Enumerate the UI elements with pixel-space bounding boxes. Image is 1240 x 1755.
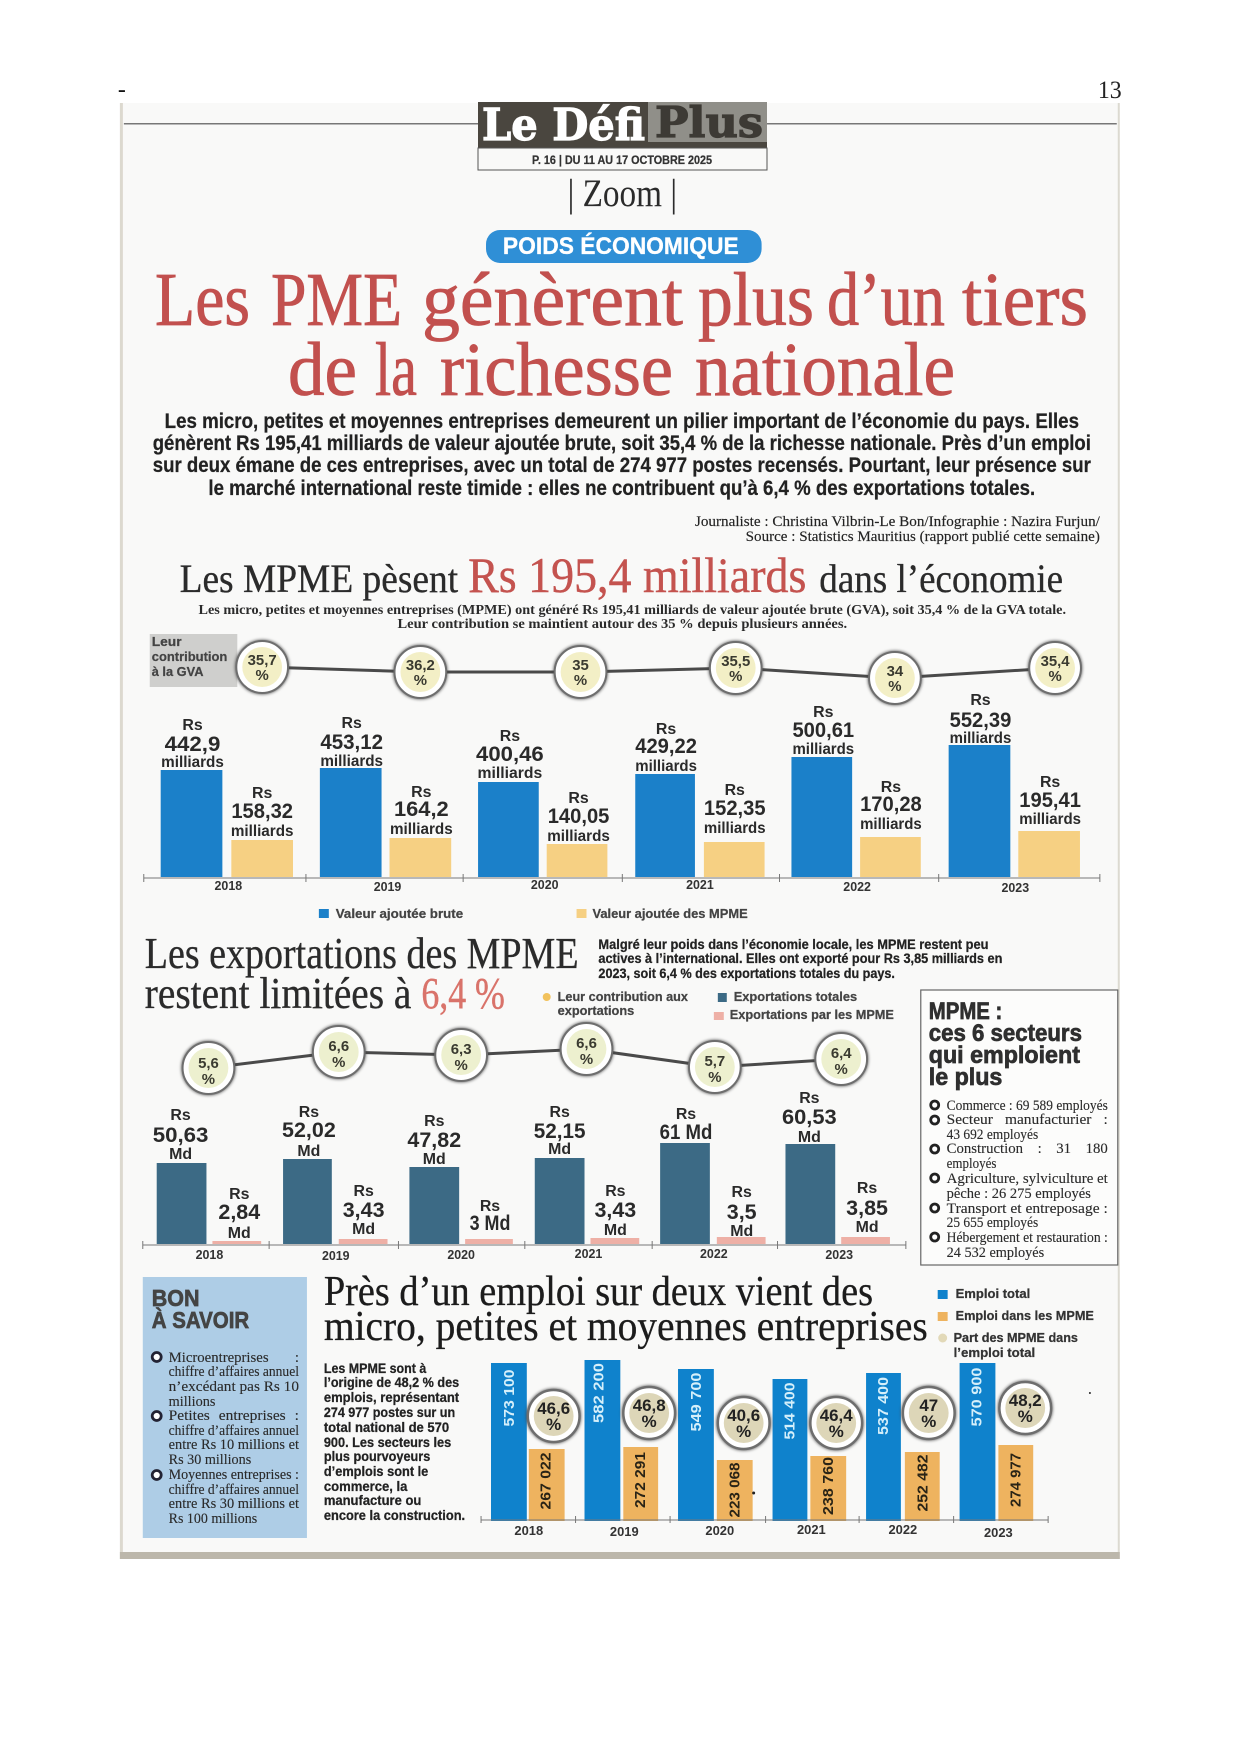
line chart: contribution GVA: % [888, 678, 902, 695]
main title: génèrent [422, 258, 683, 342]
jobs text block: 274 977 postes sur un [324, 1405, 455, 1420]
jobs text block: manufacture ou [324, 1493, 421, 1508]
bar chart: exportations: Rs [353, 1183, 374, 1200]
bar chart: emploi: 238 760 [820, 1457, 837, 1515]
bar chart: valeur ajoutée: Rs [813, 704, 834, 721]
bar chart: exportations: Md [730, 1223, 753, 1240]
definitions list: entre Rs 30 millions et [169, 1496, 300, 1512]
bar chart: valeur ajoutée: Rs [182, 717, 203, 734]
heading: jobs section: Près d’un emploi sur deux vient des [324, 1269, 873, 1315]
main title: tiers [962, 258, 1088, 342]
bar chart: valeur ajoutée: Rs [656, 721, 676, 738]
intro paragraph [153, 410, 1091, 500]
line chart: contribution GVA: % [256, 667, 269, 684]
label: contribution à la GVA: contribution [152, 649, 227, 664]
heading: GVA section: Rs 195,4 milliards [468, 548, 806, 603]
bar chart: exportations: Rs [170, 1107, 191, 1124]
panel heading [152, 1285, 250, 1333]
bar chart: emploi: 2021 [797, 1522, 826, 1537]
exports intro text: actives à l’international. Elles ont exporté pour Rs 3,85 milliards en [598, 951, 1002, 966]
sector list: Transport et entreposage : [947, 1201, 1108, 1217]
bar chart: valeur ajoutée: 2018 [215, 879, 242, 893]
heading: jobs section [324, 1269, 928, 1350]
sector list: 25 655 employés [947, 1215, 1038, 1231]
bar chart: emploi: % [736, 1422, 751, 1441]
definitions list: millions [169, 1394, 216, 1410]
line chart: contribution GVA: 35 [572, 657, 589, 674]
definitions list [152, 1350, 300, 1527]
bar chart: emploi: 2018 [514, 1523, 543, 1538]
bar chart: emploi: 537 400 [875, 1377, 892, 1435]
bar chart: valeur ajoutée: milliards [478, 765, 542, 782]
bar chart: exportations: 61 Md [660, 1121, 712, 1144]
legend: exports: Exportations par les MPME [730, 1007, 894, 1022]
line chart: contribution GVA: 35,5 [721, 653, 750, 670]
bar chart: emploi: 272 291 [632, 1452, 649, 1508]
jobs text block: Les MPME sont à [324, 1361, 427, 1376]
intro paragraph: sur deux émane de ces entreprises, avec un total de 274 977 postes recensés. Pourtant, leur présence sur [153, 454, 1091, 477]
bar chart: valeur ajoutée: Rs [881, 779, 901, 796]
masthead logo: P. 16 | DU 11 AU 17 OCTOBRE 2025 [532, 153, 712, 167]
bar chart: valeur ajoutée: 552,39 [950, 709, 1011, 732]
heading: GVA section: dans l’économie [819, 556, 1063, 601]
bar chart: exportations: Rs [480, 1198, 500, 1215]
bar chart: valeur ajoutée: milliards [1019, 811, 1081, 828]
bar chart: emploi: 40,6 [727, 1406, 760, 1425]
bar chart: valeur ajoutée: milliards [704, 820, 766, 837]
bar chart: emploi: 223 068 [727, 1463, 744, 1517]
line chart: contribution exports: 5,6 [198, 1055, 219, 1072]
bar chart: emploi: 46,6 [537, 1399, 570, 1418]
bar chart: exportations: 2,84 [218, 1201, 261, 1224]
sector list: 43 692 employés [947, 1127, 1038, 1143]
line chart: contribution exports: % [708, 1069, 721, 1086]
GVA section subtitle: Les micro, petites et moyennes entreprises (MPME) ont généré Rs 195,41 milliards de valeur ajoutée brute (GVA), soit 35,4 % de la GVA totale. [198, 602, 1066, 617]
jobs text block: d’emplois sont le [324, 1464, 429, 1479]
definitions list: Rs 30 millions [169, 1452, 251, 1468]
bar chart: emploi [481, 1360, 1051, 1540]
intro paragraph: Les micro, petites et moyennes entreprises demeurent un pilier important de l’économie du pays. Elles [165, 410, 1079, 433]
bar chart: valeur ajoutée: milliards [390, 821, 453, 838]
sector list: pêche : 26 275 employés [947, 1186, 1091, 1202]
bar chart: exportations: Rs [424, 1113, 445, 1130]
bar chart: valeur ajoutée: Rs [500, 728, 520, 745]
panel heading: MPME : [929, 998, 1002, 1025]
sector list: 24 532 employés [947, 1245, 1044, 1261]
bar chart: exportations: 2020 [447, 1248, 475, 1262]
bar chart: exportations: Rs [549, 1104, 570, 1121]
bar chart: valeur ajoutée: Rs [725, 782, 745, 799]
line chart: contribution GVA [236, 641, 1081, 704]
bar chart: emploi: % [921, 1412, 936, 1431]
bar chart: valeur ajoutée: 429,22 [635, 735, 697, 758]
bar chart: exportations: Md [297, 1143, 320, 1160]
main title: la [375, 328, 417, 412]
bar chart: exportations: 2021 [575, 1247, 602, 1261]
panel heading [929, 998, 1082, 1091]
intro paragraph: le marché international reste timide : elles ne contribuent qu’à 6,4 % des exportations totales. [208, 477, 1035, 500]
legend: jobs [938, 1286, 1094, 1360]
panel heading: À SAVOIR [152, 1307, 250, 1333]
bar chart: valeur ajoutée: 164,2 [394, 798, 449, 821]
panel: bon à savoir [143, 1277, 307, 1538]
line chart: contribution exports: 5,7 [704, 1053, 725, 1070]
bar chart: valeur ajoutée: 453,12 [320, 731, 383, 754]
panel: 6 secteurs [921, 990, 1118, 1265]
line chart: contribution exports: % [455, 1057, 468, 1074]
bar chart: valeur ajoutée: 170,28 [860, 793, 922, 816]
bar chart: emploi: 47 [919, 1396, 938, 1415]
jobs text block: l’origine de 48,2 % des [324, 1375, 459, 1390]
label: contribution à la GVA: à la GVA [152, 664, 204, 679]
bar chart: emploi: 48,2 [1009, 1391, 1042, 1410]
bar chart: emploi: 274 977 [1007, 1453, 1024, 1507]
bar chart: exportations: 3,43 [343, 1199, 385, 1222]
bar chart: valeur ajoutée: milliards [792, 741, 854, 758]
sector list: Commerce : 69 589 employés [947, 1098, 1108, 1114]
panel heading: qui emploient [929, 1042, 1080, 1069]
pill: Poids économique: POIDS ÉCONOMIQUE [503, 232, 739, 260]
legend: exports [543, 989, 894, 1022]
sector list: Agriculture, sylviculture et [947, 1171, 1109, 1187]
bar chart: valeur ajoutée: 2022 [843, 880, 871, 894]
page content [118, 77, 1122, 1559]
masthead logo: Le Défi [482, 100, 645, 151]
definitions list: entre Rs 10 millions et [169, 1437, 300, 1453]
section tag: Zoom: | Zoom | [568, 172, 677, 215]
bar chart: valeur ajoutée: 500,61 [792, 719, 854, 742]
legend: valeur ajoutée: Valeur ajoutée des MPME [592, 906, 748, 921]
bar chart: exportations: 3,5 [727, 1201, 757, 1224]
bar chart: valeur ajoutée: Rs [252, 785, 272, 802]
bar chart: exportations: Md [856, 1219, 879, 1236]
definitions list: Petites entreprises : [169, 1408, 299, 1424]
line chart: contribution exports: % [332, 1054, 345, 1071]
bar chart: valeur ajoutée: Rs [970, 692, 991, 709]
jobs text block: plus pourvoyeurs [324, 1449, 430, 1464]
bar chart: exportations: Md [228, 1225, 251, 1242]
bar chart: exportations: Md [798, 1129, 821, 1146]
bar chart: valeur ajoutée: 158,32 [231, 800, 293, 823]
jobs text block: 900. Les secteurs les [324, 1435, 451, 1450]
jobs text block: encore la construction. [324, 1508, 465, 1523]
bar chart: emploi: 46,8 [633, 1396, 666, 1415]
bar chart: valeur ajoutée: 442,9 [165, 733, 220, 756]
bar chart: exportations: Md [423, 1151, 446, 1168]
definitions list: Rs 100 millions [169, 1511, 257, 1527]
bar chart: emploi: 46,4 [820, 1406, 853, 1425]
line chart: contribution exports: 6,6 [328, 1038, 349, 1055]
main title: d’un [827, 258, 945, 342]
bar chart: emploi: 267 022 [538, 1453, 555, 1509]
GVA section subtitle: Leur contribution se maintient autour des 35 % depuis plusieurs années. [397, 616, 847, 631]
bar chart: exportations: Rs [605, 1183, 626, 1200]
page number: 13 [1098, 77, 1122, 104]
legend: jobs: Part des MPME dans [954, 1330, 1078, 1345]
legend: exports: Leur contribution aux [558, 989, 689, 1004]
line chart: contribution GVA: 34 [887, 663, 904, 680]
bar chart: valeur ajoutée: 152,35 [704, 797, 766, 820]
bar chart: exportations: Md [548, 1141, 571, 1158]
line chart: contribution exports: 6,3 [451, 1041, 472, 1058]
byline: Journaliste : Christina Vilbrin-Le Bon/Infographie : Nazira Furjun/ [695, 514, 1101, 530]
exports intro text: Malgré leur poids dans l’économie locale, les MPME restent peu [598, 937, 988, 952]
bar chart: valeur ajoutée: 2019 [374, 880, 401, 894]
bar chart: emploi: 2022 [888, 1522, 917, 1537]
jobs text block: emplois, représentant [324, 1390, 460, 1405]
definitions list: Moyennes entreprises : [169, 1467, 299, 1483]
bar chart: exportations: Rs [857, 1180, 877, 1197]
bar chart: emploi: % [1018, 1407, 1033, 1426]
main title: Les [155, 258, 250, 342]
main title: de [288, 328, 357, 412]
bar chart: exportations: Rs [799, 1090, 820, 1107]
main title: nationale [695, 328, 955, 412]
bar chart: valeur ajoutée: Rs [342, 715, 362, 732]
bar chart: valeur ajoutée: 2023 [1001, 881, 1029, 895]
bar chart: emploi: 570 900 [969, 1368, 985, 1426]
bar chart: emploi: 514 400 [781, 1383, 798, 1439]
heading: jobs section: micro, petites et moyennes entreprises [324, 1304, 928, 1350]
bar chart: exportations: 52,02 [282, 1119, 336, 1142]
line chart: contribution exports: 6,6 [576, 1035, 597, 1052]
intro paragraph: génèrent Rs 195,41 milliards de valeur ajoutée brute, soit 35,4 % de la richesse nationale. Près d’un emploi [153, 432, 1091, 455]
jobs text block: total national de 570 [324, 1420, 449, 1435]
bar chart: valeur ajoutée: 2020 [531, 878, 559, 892]
sector list [931, 1098, 1109, 1261]
bar chart: valeur ajoutée [144, 692, 1100, 895]
main title: PME [271, 258, 402, 342]
heading: exports section: 6,4 % [421, 970, 505, 1018]
heading: GVA section: Les MPME pèsent [180, 556, 458, 601]
bar chart: valeur ajoutée: 2021 [686, 878, 714, 892]
bar chart: exportations: Rs [229, 1186, 250, 1203]
bar chart: valeur ajoutée: 400,46 [476, 743, 544, 766]
line chart: contribution GVA: % [414, 672, 427, 689]
bar chart: emploi: % [829, 1422, 844, 1441]
bar chart: emploi: 549 700 [688, 1372, 705, 1432]
bar chart: valeur ajoutée: Rs [1040, 774, 1060, 791]
bar chart: emploi: 252 482 [915, 1455, 932, 1511]
bar chart: valeur ajoutée: milliards [635, 758, 697, 775]
bar chart: exportations: 2018 [196, 1248, 223, 1262]
bar chart: exportations: Md [169, 1146, 192, 1163]
sector list: employés [947, 1156, 997, 1172]
exports intro text [598, 937, 1002, 981]
legend: jobs: Emploi dans les MPME [956, 1308, 1094, 1323]
panel heading: BON [152, 1285, 199, 1311]
definitions list: chiffre d’affaires annuel [169, 1482, 299, 1498]
masthead logo: Plus [655, 98, 763, 147]
byline [695, 514, 1101, 545]
bar chart: exportations: 3 Md [470, 1212, 510, 1235]
bar chart: valeur ajoutée: 195,41 [1019, 789, 1081, 812]
exports intro text: 2023, soit 6,4 % des exportations totales du pays. [598, 966, 895, 981]
definitions list: chiffre d’affaires annuel [169, 1423, 299, 1439]
bar chart: valeur ajoutée: milliards [231, 823, 294, 840]
bar chart: exportations: 2022 [700, 1247, 728, 1261]
line chart: contribution exports: % [580, 1051, 593, 1068]
bar chart: emploi: 582 200 [590, 1363, 607, 1423]
main title [155, 258, 1088, 412]
heading: exports section [145, 930, 579, 1018]
line chart: contribution GVA: 35,7 [248, 652, 277, 669]
line chart: contribution GVA: % [729, 668, 742, 685]
bar chart: valeur ajoutée: milliards [320, 753, 383, 770]
main title: plus [698, 258, 814, 342]
line chart: contribution GVA: % [1048, 668, 1062, 685]
bar chart: exportations: Rs [299, 1104, 319, 1121]
line chart: contribution exports: 6,4 [831, 1045, 852, 1062]
sector list: Construction : 31 180 [947, 1141, 1108, 1157]
bar chart: valeur ajoutée: milliards [860, 816, 922, 833]
bar chart: valeur ajoutée: milliards [161, 754, 224, 771]
bar chart: emploi: 573 100 [501, 1370, 518, 1426]
heading: GVA section [180, 548, 1063, 603]
bar chart: valeur ajoutée: 140,05 [548, 805, 610, 828]
bar chart: valeur ajoutée: milliards [547, 828, 610, 845]
byline: Source : Statistics Mauritius (rapport publié cette semaine) [746, 529, 1100, 545]
panel heading: ces 6 secteurs [929, 1020, 1082, 1047]
jobs text block [324, 1361, 465, 1523]
bar chart: exportations: Md [352, 1221, 375, 1238]
bar chart: exportations: 2023 [825, 1248, 853, 1262]
bar chart: exportations: 2019 [322, 1249, 350, 1263]
line chart: contribution GVA: 35,4 [1041, 653, 1070, 670]
bar chart: exportations [143, 1090, 906, 1263]
jobs text block: commerce, la [324, 1479, 408, 1494]
bar chart: exportations: 3,43 [594, 1199, 636, 1222]
legend: jobs: l’emploi total [954, 1345, 1035, 1360]
bar chart: exportations: 60,53 [782, 1106, 837, 1129]
legend: jobs: Emploi total [956, 1286, 1030, 1301]
bar chart: exportations: 52,15 [534, 1120, 586, 1143]
legend: exports: Exportations totales [734, 989, 857, 1004]
bar chart: emploi: % [642, 1412, 657, 1431]
bar chart: valeur ajoutée: milliards [950, 730, 1011, 747]
bar chart: exportations: Rs [676, 1106, 696, 1123]
bar chart: emploi: 2020 [705, 1523, 734, 1538]
line chart: contribution exports: % [835, 1061, 848, 1078]
masthead logo [478, 98, 767, 170]
definitions list: n’excédant pas Rs 10 [169, 1379, 299, 1395]
bar chart: emploi: 2019 [610, 1524, 639, 1539]
label: contribution à la GVA: Leur [152, 634, 182, 649]
label: contribution à la GVA [150, 634, 237, 687]
bar chart: valeur ajoutée: Rs [411, 784, 432, 801]
definitions list: Microentreprises : [169, 1350, 299, 1366]
heading: exports section: restent limitées à [145, 970, 411, 1018]
page marker: - [118, 77, 126, 103]
sector list: Hébergement et restauration : [947, 1230, 1108, 1246]
main title: richesse [440, 328, 673, 412]
line chart: contribution GVA: 36,2 [406, 657, 435, 674]
GVA section subtitle [198, 602, 1066, 631]
bar chart: exportations: 47,82 [407, 1129, 461, 1152]
definitions list: chiffre d’affaires annuel [169, 1364, 299, 1380]
bar chart: emploi: 2023 [984, 1525, 1013, 1540]
bar chart: exportations: Rs [732, 1184, 752, 1201]
line chart: contribution exports [183, 1023, 867, 1094]
sector list: Secteur manufacturier : [947, 1112, 1108, 1128]
heading: exports section: Les exportations des MPME [145, 930, 579, 978]
bar chart: exportations: 50,63 [153, 1124, 208, 1147]
bar chart: exportations: Md [604, 1222, 627, 1239]
legend: exports: exportations [558, 1003, 634, 1018]
line chart: contribution exports: % [202, 1071, 215, 1088]
bar chart: emploi: % [546, 1415, 561, 1434]
panel heading: le plus [929, 1064, 1002, 1091]
legend: valeur ajoutée: Valeur ajoutée brute [336, 906, 463, 921]
bar chart: exportations: 3,85 [846, 1197, 888, 1220]
bar chart: valeur ajoutée: Rs [568, 790, 589, 807]
line chart: contribution GVA: % [574, 672, 587, 689]
legend: valeur ajoutée [319, 906, 748, 921]
